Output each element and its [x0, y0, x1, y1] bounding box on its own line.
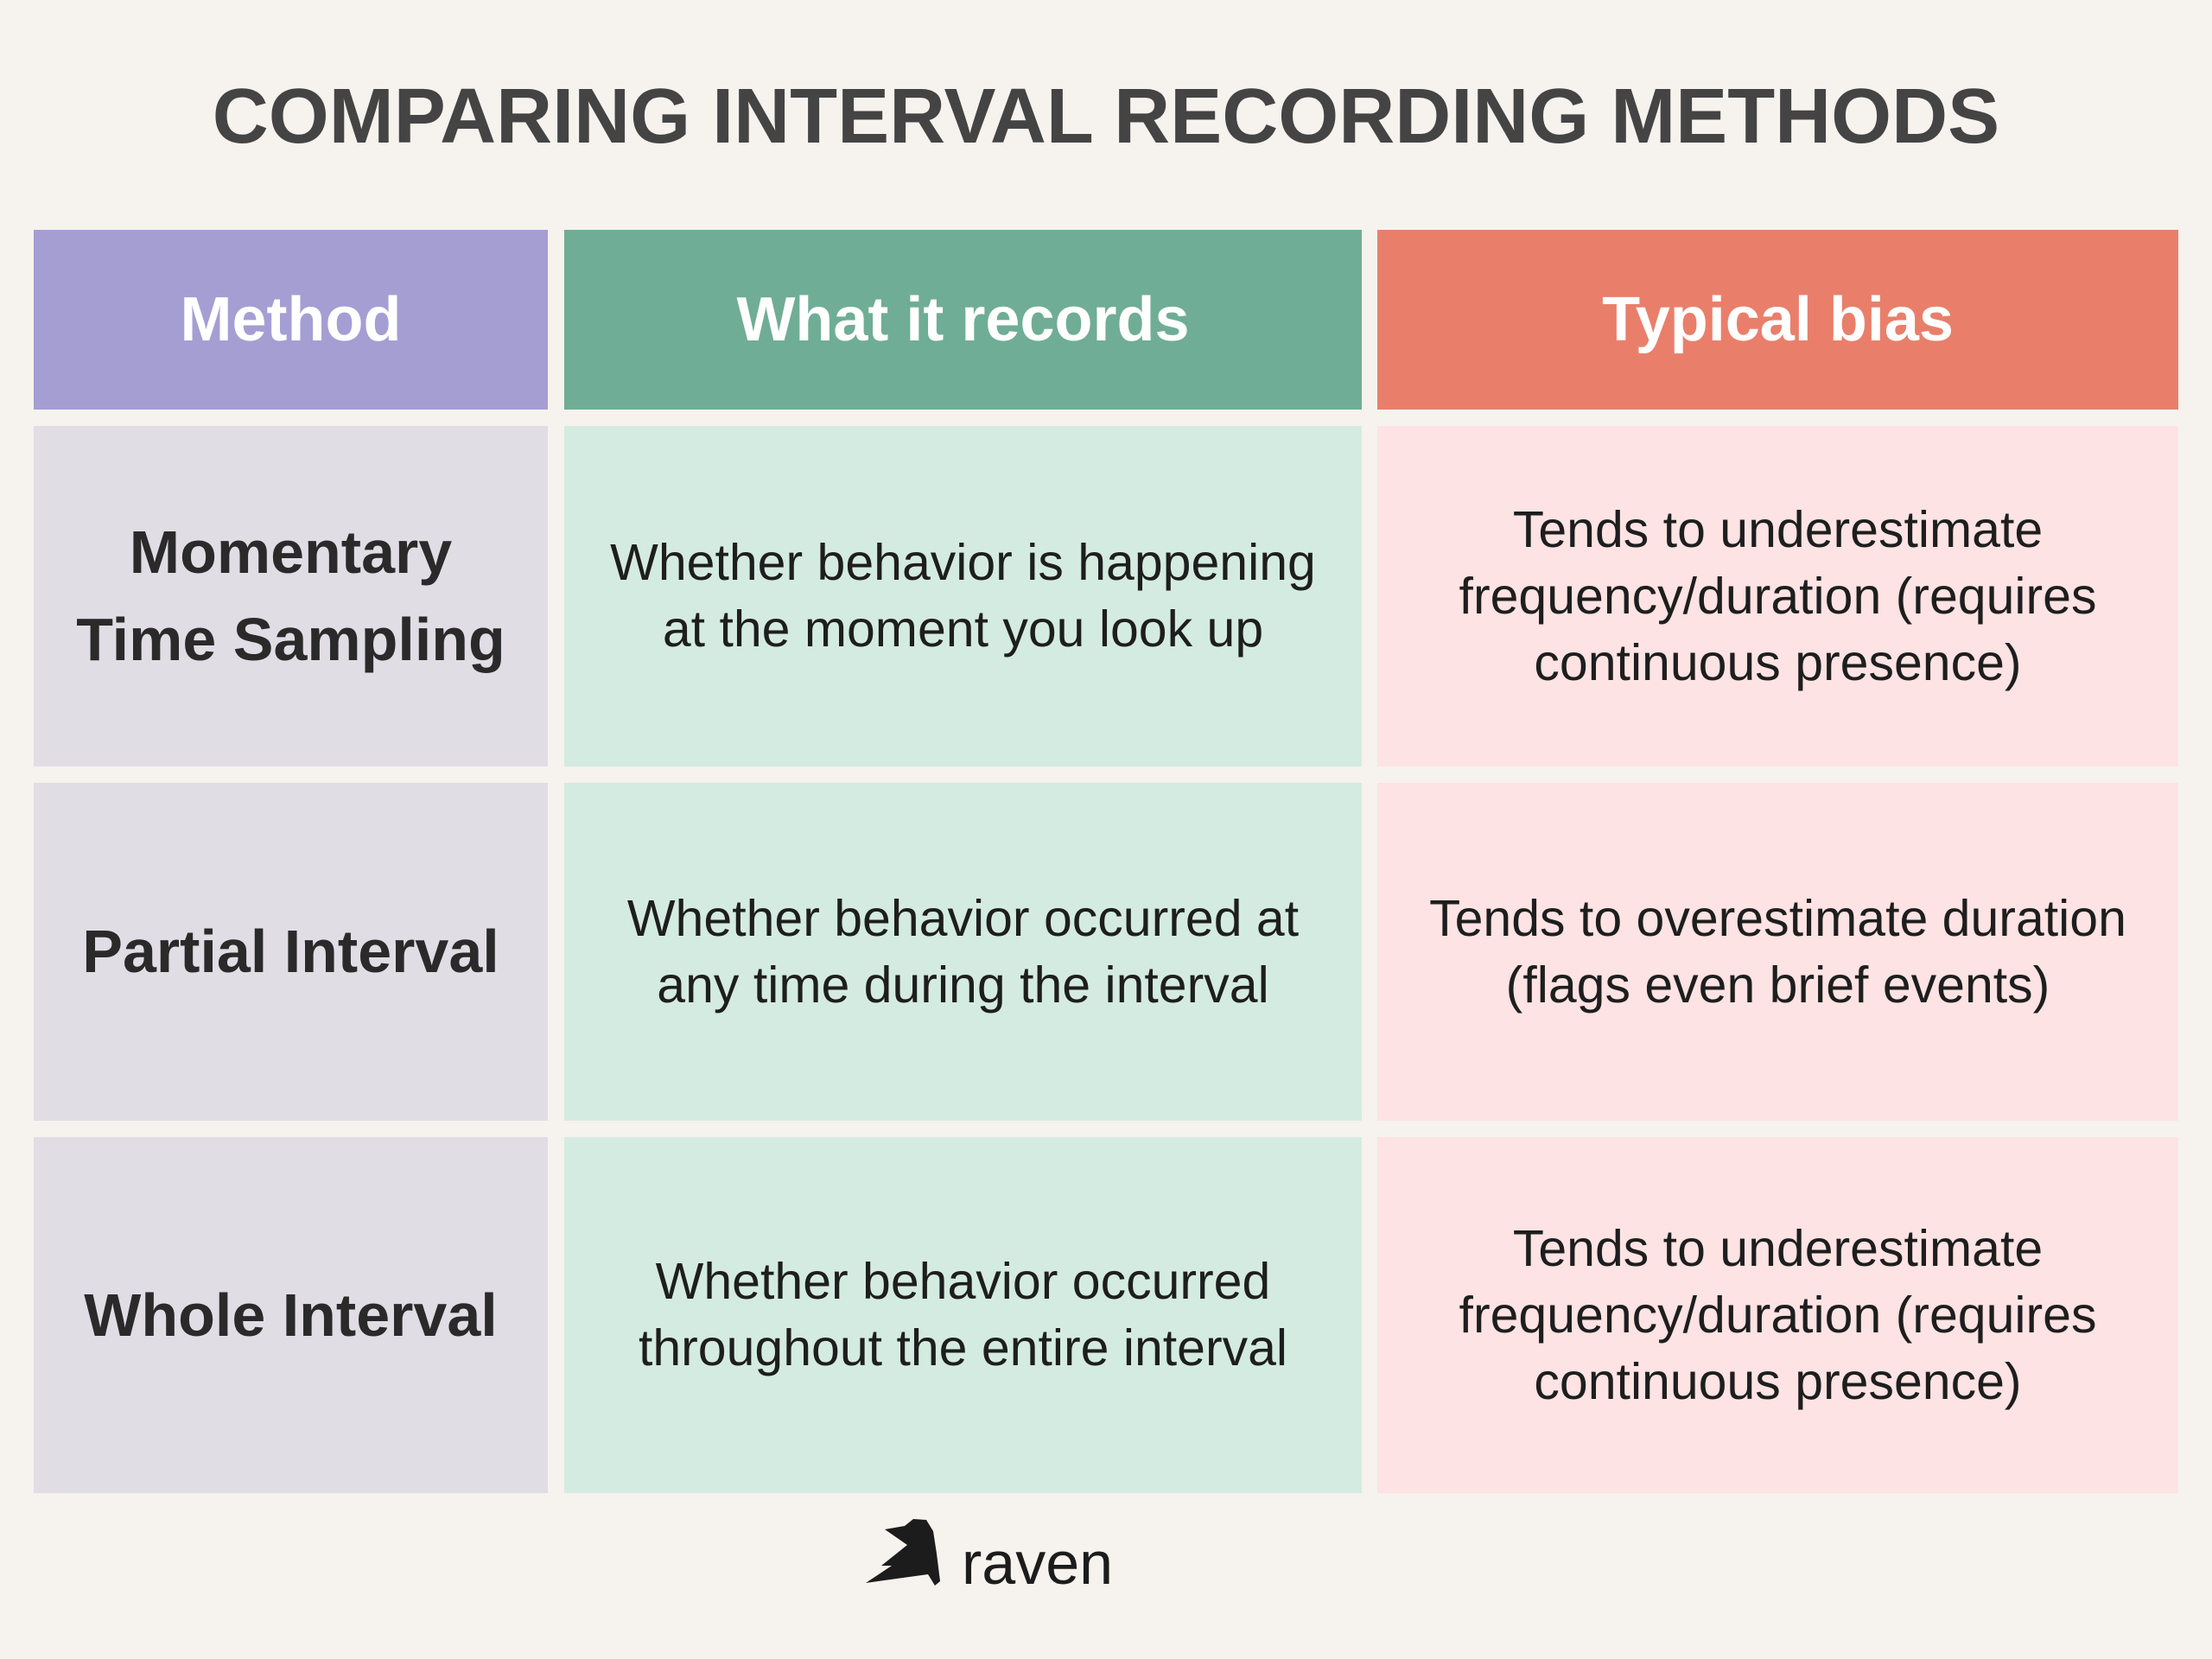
row 3 method [34, 1137, 548, 1493]
row 3 method: Whole Interval [84, 1281, 498, 1348]
row 3 records [564, 1137, 1362, 1493]
row 2 records: Whether behavior occurred at [627, 890, 1299, 947]
header: Typical bias [1377, 230, 2178, 410]
row 2 bias: (flags even brief events) [1506, 956, 2050, 1013]
row 3 records: Whether behavior occurred [656, 1253, 1270, 1310]
row 3 bias: Tends to underestimate [1513, 1220, 2043, 1277]
row 1 method: Momentary [130, 518, 452, 586]
row 1 records: Whether behavior is happening [610, 534, 1316, 591]
header: What it records: What it records [736, 285, 1190, 354]
row 1 bias: continuous presence) [1534, 634, 2022, 691]
row 3 bias: frequency/duration (requires [1459, 1286, 2096, 1343]
row 1 bias: Tends to underestimate [1513, 501, 2043, 558]
row 2 bias: Tends to overestimate duration [1429, 890, 2126, 947]
title: COMPARING INTERVAL RECORDING METHODS [213, 73, 1999, 160]
row 1 method [34, 426, 548, 766]
header: Method: Method [181, 285, 401, 354]
row 3 bias [1377, 1137, 2178, 1493]
row 2 method: Partial Interval [82, 918, 499, 985]
row 1 method: Time Sampling [76, 606, 505, 673]
row 1 records [564, 426, 1362, 766]
row 1 bias [1377, 426, 2178, 766]
row 2 method [34, 783, 548, 1121]
row 2 records [564, 783, 1362, 1121]
logo text: raven [962, 1529, 1113, 1597]
header: Method [34, 230, 548, 410]
header: Typical bias: Typical bias [1602, 285, 1954, 354]
row 1 records: at the moment you look up [663, 601, 1263, 658]
row 2 bias [1377, 783, 2178, 1121]
icon: raven bird [866, 1519, 940, 1586]
row 2 records: any time during the interval [657, 956, 1269, 1013]
header: What it records [564, 230, 1362, 410]
row 3 bias: continuous presence) [1534, 1353, 2022, 1410]
row 3 records: throughout the entire interval [639, 1319, 1287, 1376]
logo: raven [866, 1519, 1113, 1597]
row 1 bias: frequency/duration (requires [1459, 567, 2096, 624]
